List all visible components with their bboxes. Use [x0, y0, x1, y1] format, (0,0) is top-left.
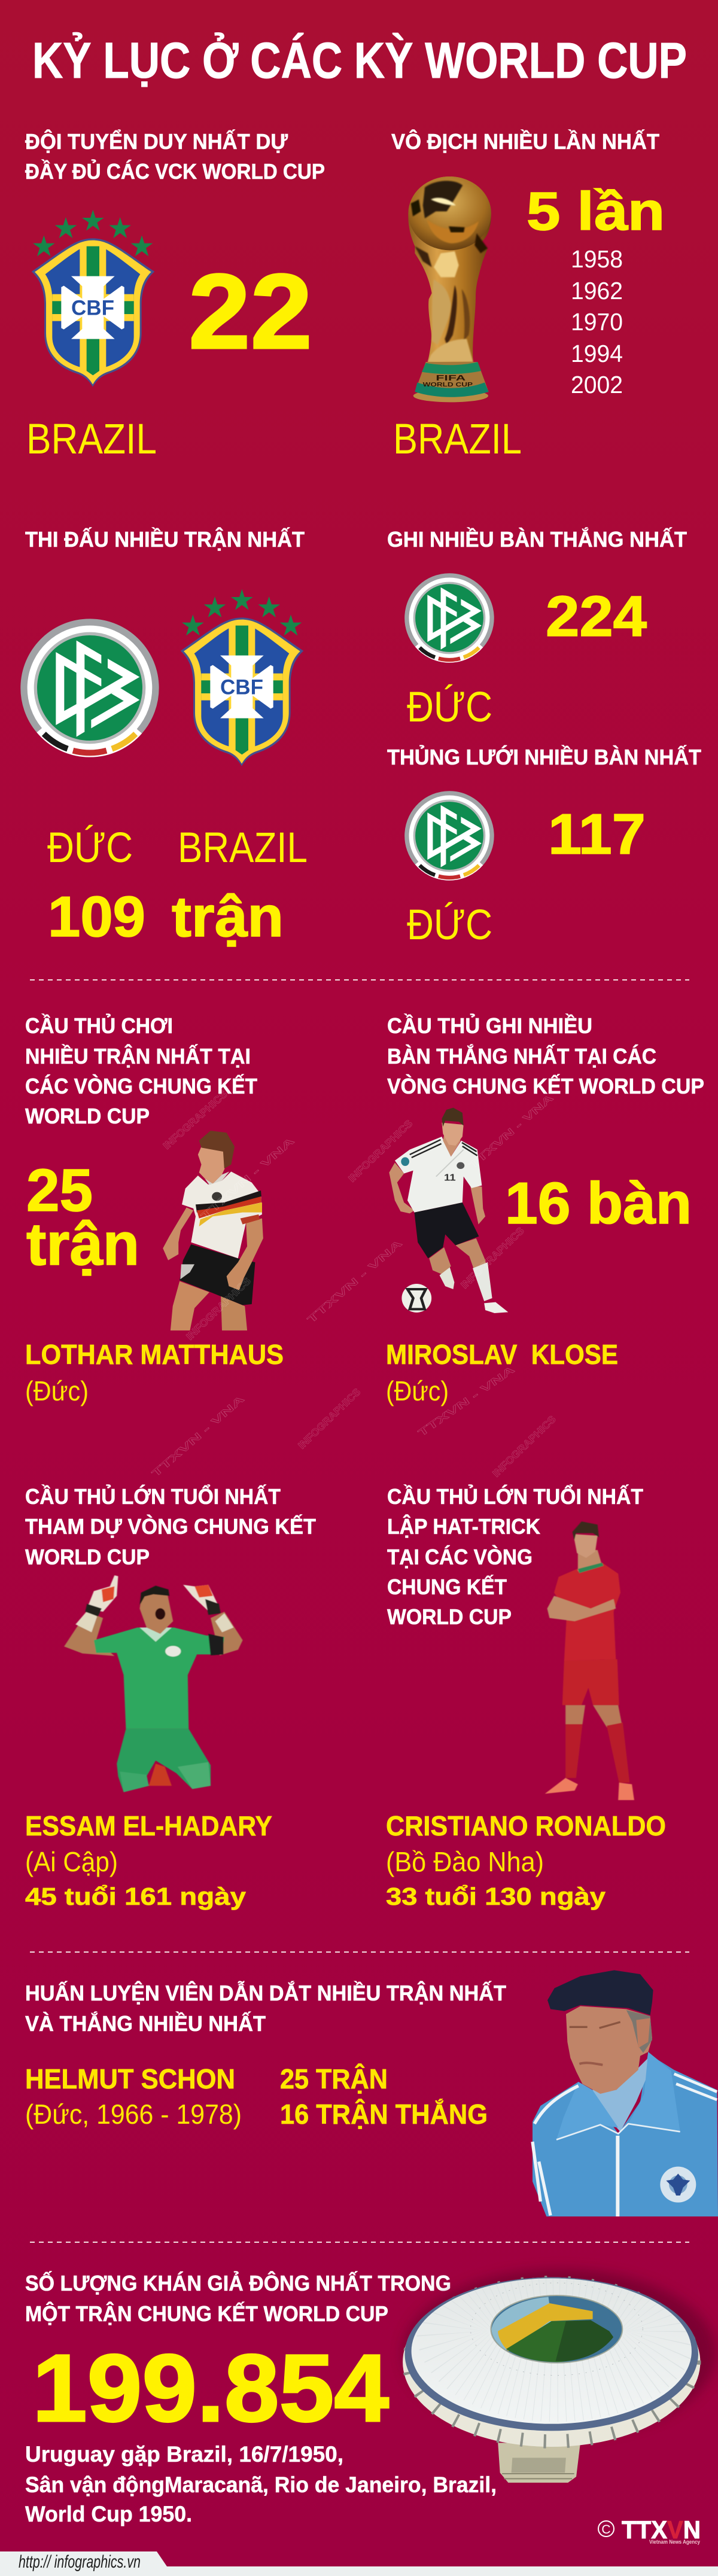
panel: most finals matches player [25, 1013, 284, 1406]
watermark: TTXVN - VNA [199, 1135, 297, 1222]
icon: Brazil crest [181, 589, 303, 766]
panel: most goals scored [387, 526, 687, 731]
heading: oldest hat-trick scorer: LẬP HAT-TRICK [387, 1514, 540, 1539]
label: Essam El-Hadary: (Ai Cập) [25, 1846, 118, 1877]
heading: coach record: HUẤN LUYỆN VIÊN DẪN DẮT NHIỀU TRẬN NHẤT [25, 1980, 506, 2005]
label: Lothar Matthaus [25, 1339, 284, 1406]
heading: only team in every finals: ĐẦY ĐỦ CÁC VCK WORLD CUP [25, 159, 325, 184]
label: Cristiano Ronaldo: (Bồ Đào Nha) [386, 1846, 544, 1877]
panel: most titles [391, 129, 665, 463]
heading: record attendance: MỘT TRẬN CHUNG KẾT WORLD CUP [25, 2301, 388, 2326]
label: Helmut Schon: (Đức, 1966 - 1978) [25, 2099, 242, 2130]
logo: TTXVN: C [601, 2523, 611, 2537]
heading: oldest hat-trick scorer: WORLD CUP [387, 1604, 512, 1629]
heading: only team in every finals: ĐỘI TUYỂN DUY NHẤT DỰ [25, 129, 288, 154]
heading: player with most matches: WORLD CUP [25, 1104, 150, 1128]
number: 117: 117 [548, 802, 646, 866]
photo: Maracana stadium [403, 2269, 716, 2483]
photo: Essam El-Hadary [64, 1575, 243, 1792]
watermark: TTXVN - VNA [467, 1092, 555, 1171]
number: 224: 224 [546, 584, 647, 648]
heading: most conceded: THỦNG LƯỚI NHIỀU BÀN NHẤT [387, 744, 701, 769]
label: Miroslav Klose: (Đức) [386, 1375, 449, 1406]
panel: most goals conceded [387, 744, 701, 949]
list: winning years: 2002 [571, 371, 623, 398]
label: Brazil: BRAZIL [26, 416, 157, 463]
icon: World Cup trophy: WORLD CUP [423, 382, 473, 388]
number: 5 titles: 5 lần [527, 182, 665, 242]
panel: oldest player [25, 1483, 316, 1910]
watermark: INFOGRAPHICS [459, 1225, 527, 1291]
watermark: INFOGRAPHICS [491, 1414, 558, 1479]
photo: Lothar Matthaus [163, 1131, 263, 1330]
icon: Brazil crest [32, 210, 154, 387]
label: Cristiano Ronaldo: CRISTIANO RONALDO [386, 1810, 666, 1841]
heading: player with most matches: CẦU THỦ CHƠI [25, 1013, 173, 1038]
list: winning years: 1962 [571, 277, 623, 305]
label: Brazil: BRAZIL [393, 416, 522, 463]
label: Essam El-Hadary: ESSAM EL-HADARY [25, 1810, 272, 1841]
list: winning years [571, 245, 623, 398]
heading: player with most goals: CẦU THỦ GHI NHIỀU [387, 1013, 592, 1038]
label: Helmut Schon [25, 2063, 242, 2130]
photo: Cristiano Ronaldo [545, 1521, 634, 1800]
list: winning years: 1994 [571, 340, 623, 367]
watermark: INFOGRAPHICS [184, 1275, 253, 1342]
heading: player with most goals: BÀN THẮNG NHẤT TẠI CÁC [387, 1043, 656, 1068]
heading: oldest player: CẦU THỦ LỚN TUỔI NHẤT [25, 1483, 281, 1509]
label: Essam El-Hadary [25, 1810, 272, 1910]
label: Miroslav Klose: MIROSLAV KLOSE [386, 1339, 618, 1370]
heading: player with most goals: VÒNG CHUNG KẾT WORLD CUP [387, 1073, 704, 1098]
label: Miroslav Klose [386, 1339, 618, 1406]
watermark [150, 1088, 558, 1479]
logo: TTXVN: TTXVN [622, 2516, 701, 2544]
number: 199.854: 199.854 [32, 2334, 389, 2441]
heading: record attendance [25, 2270, 451, 2326]
heading: most matches: THI ĐẤU NHIỀU TRẬN NHẤT [25, 526, 305, 552]
label: Cristiano Ronaldo: 33 tuổi 130 ngày [386, 1883, 606, 1910]
photo: Miroslav Klose [389, 1108, 508, 1313]
text: match details: Uruguay gặp Brazil, 16/7/1950, [25, 2442, 343, 2467]
number: 25 matches: 25 [26, 1157, 93, 1224]
footer band [0, 2551, 718, 2576]
list: winning years: 1970 [571, 308, 623, 336]
label: Lothar Matthaus: LOTHAR MATTHAUS [25, 1339, 284, 1370]
number: 25 matches [26, 1157, 139, 1278]
watermark: TTXVN - VNA [150, 1393, 247, 1479]
text: match details [25, 2442, 497, 2526]
heading: most goals: GHI NHIỀU BÀN THẮNG NHẤT [387, 526, 687, 552]
panel: team in every finals [25, 129, 325, 463]
heading: player with most goals [387, 1013, 704, 1098]
heading: oldest hat-trick scorer: CẦU THỦ LỚN TUỔI NHẤT [387, 1483, 643, 1509]
heading: record attendance: SỐ LƯỢNG KHÁN GIẢ ĐÔNG NHẤT TRONG [25, 2270, 451, 2295]
list: winning years: 1958 [571, 245, 623, 273]
number: 109 matches: 109 [48, 885, 145, 949]
stats: coach matches and wins [280, 2063, 488, 2130]
panel: record attendance [25, 2269, 716, 2545]
number: 16 goals: 16 bàn [505, 1170, 692, 1236]
heading: coach record: VÀ THẮNG NHIỀU NHẤT [25, 2011, 266, 2036]
heading: player with most matches: CÁC VÒNG CHUNG KẾT [25, 1073, 257, 1098]
panel: most finals goals player [386, 1013, 704, 1406]
icon: Germany crest [407, 793, 492, 878]
label: Germany: ĐỨC [47, 824, 133, 872]
icon: Brazil crest: CBF [71, 297, 114, 320]
text: match details: World Cup 1950. [25, 2502, 192, 2526]
heading: oldest hat-trick scorer: TẠI CÁC VÒNG [387, 1544, 533, 1569]
heading: oldest player [25, 1483, 316, 1569]
icon: Brazil crest: CBF [220, 676, 263, 699]
number: 109 matches [48, 885, 284, 949]
number: 22: 22 [188, 252, 312, 371]
stats: coach matches and wins: 25 TRẬN [280, 2063, 388, 2094]
icon: Germany crest [407, 576, 492, 660]
label: Germany: ĐỨC [407, 684, 492, 731]
text: match details: Sân vận độngMaracanã, Rio de Janeiro, Brazil, [25, 2473, 497, 2497]
icon: World Cup trophy [408, 176, 491, 402]
panel: coach record [25, 1970, 718, 2216]
heading: oldest hat-trick scorer: CHUNG KẾT [387, 1575, 507, 1599]
photo: Miroslav Klose: 11 [444, 1171, 456, 1183]
label: Brazil: BRAZIL [178, 824, 308, 872]
label: Germany: ĐỨC [407, 902, 492, 949]
watermark: TTXVN - VNA [416, 1364, 517, 1439]
heading: oldest player: WORLD CUP [25, 1545, 150, 1569]
panel: oldest hat-trick [386, 1483, 666, 1910]
heading: most titles: VÔ ĐỊCH NHIỀU LẦN NHẤT [391, 129, 659, 154]
footer band: http:// infographics.vn [19, 2552, 141, 2572]
label: Essam El-Hadary: 45 tuổi 161 ngày [25, 1883, 246, 1910]
heading: oldest player: THAM DỰ VÒNG CHUNG KẾT [25, 1514, 316, 1539]
heading: coach record [25, 1980, 506, 2036]
heading: oldest hat-trick scorer [387, 1483, 643, 1629]
heading: only team in every finals [25, 129, 325, 184]
panel: most matches played [24, 526, 308, 949]
label: Helmut Schon: HELMUT SCHON [25, 2063, 235, 2094]
number: 25 matches: trận [26, 1211, 139, 1278]
logo: TTXVN: Vietnam News Agency [649, 2539, 701, 2545]
icon: World Cup trophy: FIFA [436, 374, 466, 382]
photo: Helmut Schon [533, 1970, 718, 2216]
watermark: INFOGRAPHICS [346, 1118, 415, 1185]
watermark: TTXVN - VNA [305, 1237, 404, 1326]
label: Cristiano Ronaldo [386, 1810, 666, 1910]
icon: Germany crest [24, 622, 156, 754]
heading: player with most matches [25, 1013, 257, 1128]
heading: player with most matches: NHIỀU TRẬN NHẤT TẠI [25, 1043, 251, 1068]
stats: coach matches and wins: 16 TRẬN THẮNG [280, 2099, 488, 2130]
watermark: INFOGRAPHICS [161, 1088, 229, 1152]
label: Lothar Matthaus: (Đức) [25, 1375, 89, 1406]
watermark: INFOGRAPHICS [296, 1386, 363, 1451]
number: 109 matches: trận [172, 885, 284, 949]
